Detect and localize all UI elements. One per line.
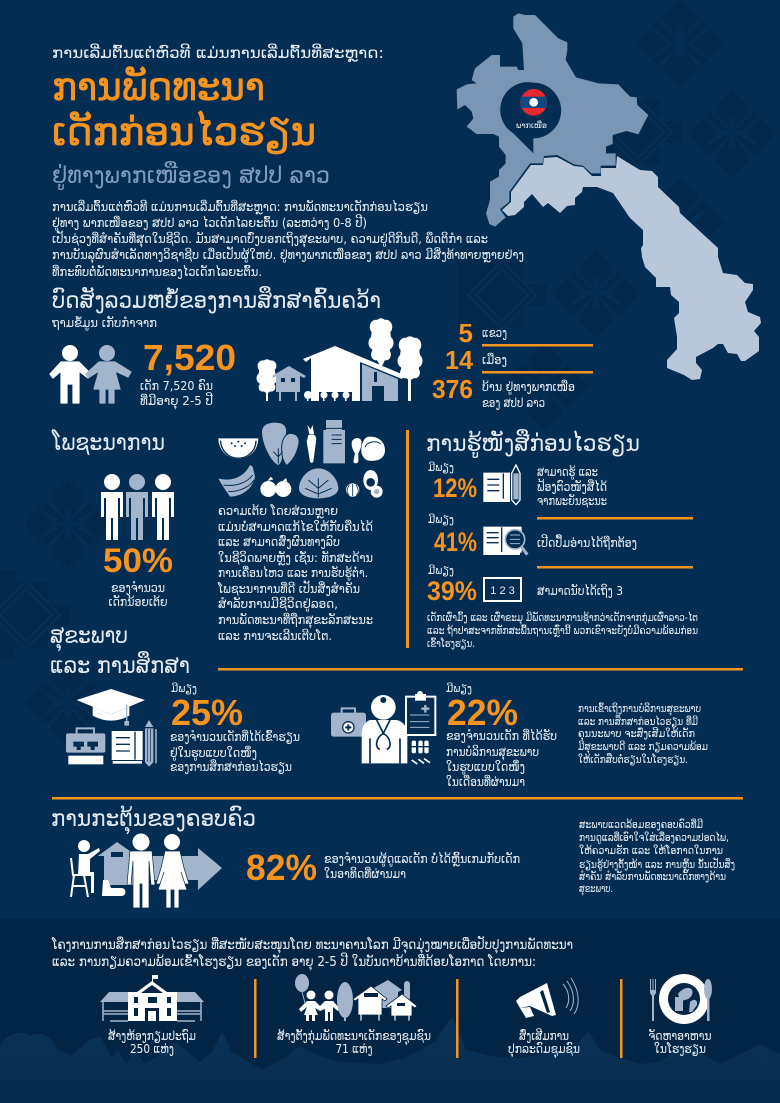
- flag of Laos: [520, 89, 547, 116]
- stat: 41 percent: ມີພຽງ: [428, 513, 454, 526]
- footer background: [0, 919, 780, 1103]
- stat: 25 percent: ຂອງການສຶກສາກ່ອນໄວຮຽນ: [170, 759, 292, 774]
- stat: 7,520 children: [140, 337, 236, 410]
- stat: 22 percent: ໃນຮູບແບບໃດໜຶ່ງ: [446, 759, 525, 775]
- icon: village houses and trees: [256, 318, 422, 401]
- heading: family stimulation: ການກະຕຸ້ນຂອງຄອບຄົວ: [51, 804, 256, 835]
- stats: provinces, districts, villages: 5: [459, 318, 473, 348]
- stat: 41 percent: [428, 513, 637, 557]
- text: stunting explanation: ແລະ ການຈະເລີນເຕີບໂຕ.: [218, 628, 332, 643]
- stat: 25 percent: 25%: [171, 692, 243, 733]
- heading: nutrition: ໂພຊະນາການ: [51, 428, 165, 456]
- dividers: [254, 979, 622, 1058]
- map pin: Oudomxay: [500, 82, 561, 153]
- stat: 12 percent: ມີພຽງ: [428, 461, 454, 474]
- map: southern Laos: [502, 156, 761, 380]
- stat: 7,520 children: 7,520: [143, 337, 236, 378]
- stat: 7,520 children: ທີ່ມີອາຍຸ 2-5 ປີ: [140, 392, 213, 410]
- panel: pre-school literacy: [406, 427, 698, 650]
- text: stunting explanation: ການພັດທະນາທີ່ຖືກສຸຂະລັກສະນະ: [218, 612, 373, 629]
- label: community groups: [277, 1028, 431, 1056]
- icon: megaphone: [516, 978, 578, 1018]
- text: ethnic group note: ເດັກເຜົ່າມົ້ງ ແລະ ເຜົ່າຂະມຸ ມີພັດທະນາການຊ້າກວ່າເດັກຈາກກຸ່ມເຜົ່າລາວ-ໄຕ: [427, 611, 698, 625]
- icon: doctor, medical kit, clipboard: [331, 691, 435, 764]
- intro paragraph: ການເລີ່ມຕົ້ນແຕ່ຫົວທີ ແມ່ນການເລີ່ມຕົ້ນທີ່ສະຫຼາດ: ການພັດທະນາເດັກກ່ອນໄວຮຽນ: [52, 199, 428, 214]
- label: school: [108, 1028, 196, 1056]
- background pattern: [0, 0, 776, 747]
- stat: 39 percent: [427, 564, 623, 606]
- stat: 25 percent: ຂອງຈຳນວນເດັກທີ່ໄດ້ເຂົ້າຮຽນ: [170, 729, 300, 744]
- stat: 12 percent: [428, 461, 607, 508]
- icon: number card: 1 2 3: [490, 585, 515, 597]
- stat: 82 percent: ຂອງຈຳນວນຜູ້ດູແລເດັກ ບໍ່ໄດ້ຫຼິ້ນເກມກັບເດັກ: [324, 851, 520, 867]
- text: ethnic group note: [427, 611, 698, 650]
- icon: book and magnifier: [483, 527, 527, 555]
- stats: provinces, districts, villages: 376: [432, 374, 473, 404]
- stats: provinces, districts, villages: ຂອງ ສປປ ລາວ: [482, 396, 545, 410]
- text: stunting explanation: ແມ່ນບໍ່ສາມາດແກ້ໄຂໃຫ້ກັບຄືນໄດ້: [218, 519, 373, 534]
- text: stunting explanation: ຄວາມເຕ້ຍ ໂດຍສ່ວນຫຼາຍ: [218, 503, 338, 518]
- label: school: 250 ແຫ່ງ: [130, 1042, 174, 1056]
- icon: book and pencil: [483, 465, 520, 505]
- text: access to services: ແລະ ການສຶກສາກ່ອນໄວຮຽນ ທີ່ມີ: [578, 715, 698, 728]
- text: family environment: ສຸຂະພາບ.: [579, 882, 613, 896]
- icons: food: [218, 420, 385, 498]
- text: stunting explanation: ສຳລັບການມີຊີວິດຢູ່ລອດ,: [218, 596, 338, 612]
- text: family environment: ການດູແລທີ່ເອົາໃຈໃສ່ເລື່ອງຄວາມປອດໄພ,: [579, 831, 729, 844]
- subtitle: ຢູ່ທາງພາກເໜືອຂອງ ສປປ ລາວ: [52, 160, 330, 191]
- stat: 41 percent: ເປີດປຶ້ມອ່ານໄດ້ຖືກຕ້ອງ: [537, 534, 637, 550]
- divider bar: [406, 430, 409, 648]
- label: school meals: ໃນໂຮງຮຽນ: [654, 1042, 706, 1056]
- text: access to services: ມີສຸຂະພາບດີ ແລະ ກຽມຄວາມພ້ອມ: [578, 740, 708, 754]
- map of Lao PDR: [457, 13, 761, 380]
- text: stunting explanation: [217, 503, 373, 643]
- kicker: ການເລີ່ມຕົ້ນແຕ່ຫົວທີ ແມ່ນການເລີ່ມຕົ້ນທີ່ສະຫຼາດ:: [52, 43, 384, 62]
- stats: provinces, districts, villages: [432, 318, 593, 410]
- intro heading block: [52, 43, 384, 191]
- stat: 50 percent stunted: ເດັກນ້ອຍເຕ້ຍ: [108, 594, 168, 609]
- text: family environment: ສະພາບແວດລ້ອມຂອງຄອບຄົວທີ່ມີ: [579, 818, 703, 831]
- stat: 22 percent: ຂອງຈຳນວນເດັກ ທີ່ໄດ້ຮັບ: [446, 728, 557, 743]
- stat: 82 percent: 82%: [246, 847, 317, 888]
- text: family environment: ຮຽນຮູ້ຢ່າງຕັ້ງໜ້າ ແລະ ການຫຼິ້ນ ນັ້ນເປັນສິ່ງ: [579, 857, 735, 871]
- map pin label: ພາກເໜືອ: [516, 120, 547, 130]
- label: community mobilisation: [508, 1028, 580, 1059]
- stats: provinces, districts, villages: ບ້ານ ຢູ່ທາງພາກເໜືອ: [482, 379, 575, 395]
- panel: footer programme: [0, 919, 780, 1103]
- stat: 50 percent stunted: 50%: [103, 542, 173, 580]
- label: community groups: ສ້າງຕັ້ງກຸ່ມພັດທະນາເດັກຂອງຊຸມຊົນ: [277, 1028, 431, 1046]
- map: northern Laos: [457, 13, 648, 227]
- label: school meals: [648, 1029, 712, 1056]
- text: access to services: ຄຸນນະພາບ ຈະສົ່ງເສີມໃຫ້ເດັກ: [578, 727, 695, 741]
- intro paragraph: ທີ່ກະທົບຕໍ່ພັດທະນາການຂອງໄວເດັກໄລຍະຕົ້ນ.: [52, 264, 262, 279]
- stat: 22 percent: ການບໍລິການສຸຂະພາບ: [446, 744, 539, 761]
- stat: 50 percent stunted: [103, 542, 173, 609]
- data source note: ຖາມຂໍ້ມູນ ເກັບກຳຈາກ: [52, 315, 157, 331]
- stat: 82 percent: [246, 847, 520, 888]
- text: stunting explanation: ການເຄື່ອນໄຫວ ແລະ ການຮັບຮູ້ຕ່ຳ.: [218, 565, 368, 581]
- stat: 12 percent: 12%: [433, 473, 477, 503]
- text: access to services: ໃຫ້ເດັກສືບຕໍ່ຮຽນໃນໂຮງຮຽນ.: [578, 753, 688, 766]
- label: school: ສ້າງຫ້ອງກຽມປະຖົມ: [108, 1028, 196, 1043]
- text: stunting explanation: ໂພຊະນາການທີ່ດີ ເປັນສິ່ງສຳຄັນ: [217, 581, 360, 596]
- heading: health and education: [50, 621, 190, 679]
- stat: 22 percent: 22%: [447, 692, 518, 733]
- heading: literacy: ການຮູ້ໜັງສືກ່ອນໄວຮຽນ: [426, 427, 640, 459]
- stat: 22 percent: [446, 682, 557, 789]
- section heading: research overview: ບົດສັງລວມຫຍໍ້ຂອງການສຶກສາຄົ້ນຄວ້າ: [52, 284, 381, 314]
- text: family environment: ສຳຄັນ ສຳລັບການພັດທະນາເດັກທາງດ້ານ: [579, 870, 726, 883]
- stat: 12 percent: ຟ້ອງຕົວໜັງສືໄດ້: [537, 478, 607, 494]
- text: ethnic group note: ເຂົ້າໂຮງຮຽນ.: [427, 637, 475, 650]
- text: access to services: ການເຂົ້າເຖິງການບໍລິການສຸຂະພາບ: [578, 702, 701, 716]
- label: community mobilisation: ສົ່ງເສີມການ: [519, 1028, 569, 1043]
- icon: number card: [484, 578, 521, 601]
- stat: 39 percent: 39%: [427, 576, 477, 606]
- heading: health and education: ແລະ ການສຶກສາ: [50, 649, 190, 679]
- text: access to services: [578, 702, 708, 766]
- text: family environment: ໃຫ້ຄວາມຮັກ ແລະ ໃຫ້ໂອກາດໃນການ: [579, 844, 723, 857]
- text: ethnic group note: ແລະ ຖ້າປາສະຈາກທັກສະພື້ນຖານເຫຼົ່ານີ້ ພວກເຂົາຈະຍັງບໍ່ມີຄວາມພ້ອມກ່ອນ: [427, 624, 698, 637]
- stat: 7,520 children: ເດັກ 7,520 ຄົນ: [140, 379, 213, 393]
- panel: family stimulation: [51, 804, 735, 908]
- label: community mobilisation: ປຸກລະດົມຊຸມຊົນ: [508, 1042, 580, 1059]
- intro paragraph: ເປັນຊ່ວງທີ່ສຳຄັນທີ່ສຸດໃນຊີວິດ. ມັນສາມາດບົ່ງບອກເຖິງສຸຂະພາບ, ຄວາມຢູ່ດີກິນດີ, ພຶດຕິກຳ ແລະ: [52, 231, 488, 248]
- stat: 39 percent: ມີພຽງ: [428, 564, 454, 577]
- icon: two children: [50, 345, 131, 403]
- stat: 39 percent: ສາມາດນັບໄດ້ເຖິງ 3: [537, 583, 623, 598]
- text: stunting explanation: ແລະ ສາມາດສົ່ງຜົນທາງລົບ: [218, 535, 340, 549]
- stat: 12 percent: ສາມາດຮູ້ ແລະ: [537, 464, 598, 480]
- stat: 22 percent: ໃນເດືອນທີ່ຜ່ານມາ: [446, 774, 525, 789]
- text: programme intro: [51, 937, 573, 971]
- stat: 22 percent: ມີພຽງ: [446, 682, 472, 695]
- title: ເດັກກ່ອນໄວຮຽນ: [52, 110, 316, 154]
- stat: 12 percent: ຈາກພະຍັນຊະນະ: [537, 494, 607, 508]
- icon: family with arrow and house: [71, 834, 222, 908]
- stat: 50 percent stunted: ຂອງຈຳນວນ: [111, 581, 165, 595]
- icon: plate with cutlery: [650, 974, 712, 1024]
- intro paragraph: ການບັນລຸຜົນສຳເລັດທາງວິຊາຊີບ ເມື່ອເປັນຜູ້ໃຫຍ່. ຢູ່ທາງພາກເໜືອຂອງ ສປປ ລາວ ມີສິ່ງທ້າທາຍຫຼາຍຢ່າງ: [52, 247, 524, 264]
- skyline silhouette: [0, 1018, 780, 1103]
- stat: 25 percent: [170, 682, 300, 774]
- heading: health and education: ສຸຂະພາບ: [50, 621, 128, 652]
- icon: school building: [100, 975, 204, 1021]
- text: stunting explanation: ໃນຊີວິດພາຍຫຼັງ ເຊັ່ນ: ທັກສະດ້ານ: [218, 550, 373, 565]
- panel: health and education: [50, 621, 743, 789]
- icon: community children and houses: [295, 974, 417, 1021]
- title: ການພັດທະນາ: [52, 65, 265, 109]
- intro paragraph: [52, 199, 524, 279]
- stat: 25 percent: ມີພຽງ: [171, 682, 197, 695]
- stat: 82 percent: ໃນອາທິດທີ່ຜ່ານມາ: [324, 866, 406, 881]
- icon: three people: [101, 474, 174, 540]
- intro paragraph: ຢູ່ທາງ ພາກເໜືອຂອງ ສປປ ລາວ ໄວເດັກໄລຍະຕົ້ນ (ລະຫວ່າງ 0-8 ປີ): [52, 214, 367, 231]
- stats: provinces, districts, villages: 14: [445, 345, 474, 375]
- icon: graduation cap, briefcase, book: [66, 689, 156, 767]
- text: family environment: [579, 818, 735, 896]
- label: community groups: 71 ແຫ່ງ: [336, 1042, 372, 1056]
- stat: 41 percent: 41%: [434, 527, 477, 557]
- stats: provinces, districts, villages: ແຂວງ: [482, 326, 507, 340]
- title: [52, 65, 316, 154]
- label: school meals: ຈັດຫາອາຫານ: [648, 1029, 712, 1043]
- text: programme intro: ໂຄງການການສຶກສາກ່ອນໄວຮຽນ ທີ່ສະໜັບສະໜຸນໂດຍ ທະນາຄານໂລກ ມີຈຸດມຸ່ງໝາຍເພື່ອປັບປຸງການພັດທະນາ: [51, 937, 573, 954]
- stat: 25 percent: ຢູ່ໃນຮູບແບບໃດໜຶ່ງ: [170, 745, 257, 761]
- text: programme intro: ແລະ ການກຽມຄວາມພ້ອມເຂົ້າໂຮງຮຽນ ຂອງເດັກ ອາຍຸ 2-5 ປີ ໃນບັນດາບ້ານທີ່ດ້ອຍໂອກາດ ໂດຍການ:: [52, 952, 536, 971]
- stats: provinces, districts, villages: ເມືອງ: [482, 352, 507, 367]
- panel: nutrition: [51, 420, 385, 643]
